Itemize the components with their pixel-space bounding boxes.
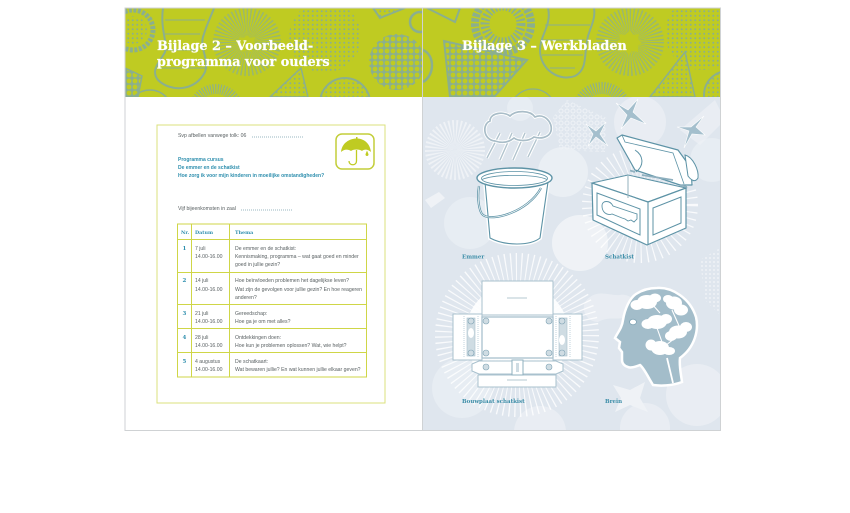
table: programme: Datum xyxy=(195,230,213,236)
icon: bucket xyxy=(477,168,552,244)
label: Emmer: Emmer xyxy=(462,254,484,260)
table: programme: 14.00-16.00 xyxy=(195,343,223,349)
text block: call-off note xyxy=(178,133,304,139)
table: programme: 14.00-16.00 xyxy=(195,319,223,325)
table: programme: 4 augustus xyxy=(195,359,221,365)
label: Schatkist: Schatkist xyxy=(605,254,634,260)
table: programme: De emmer en de schatkist: xyxy=(235,246,296,252)
label: Brein: Brein xyxy=(605,399,622,405)
table: programme: 5 xyxy=(182,359,186,365)
text block: course title: Hoe zorg ik voor mijn kinderen in moeilijke omstandigheden? xyxy=(178,173,324,179)
heading: Bijlage 2: programma voor ouders xyxy=(157,55,330,70)
panel: right page xyxy=(423,8,720,430)
table: programme: 2 xyxy=(182,278,186,284)
table: programme: 1 xyxy=(182,246,186,252)
background white diatom pattern xyxy=(425,97,720,430)
table: programme: 4 xyxy=(182,335,186,341)
icon: umbrella xyxy=(336,134,374,169)
table: programme: Kennismaking, programma – wat gaat goed en minder xyxy=(235,254,359,260)
table: programme: 14 juli xyxy=(195,278,208,284)
text block: call-off note: Svp afbellen vanwege tolk: 06 xyxy=(178,133,246,139)
heading: Bijlage 2 xyxy=(157,39,330,70)
text block: course title: Programma cursus xyxy=(178,157,224,163)
text block: five meetings xyxy=(178,206,293,212)
table: programme: De schatkaart: xyxy=(235,359,268,365)
icon: key xyxy=(602,202,637,222)
table: programme: Wat bewaren jullie? En wat kunnen jullie elkaar geven? xyxy=(235,367,361,373)
table: programme: 14.00-16.00 xyxy=(195,287,223,293)
panel: form frame xyxy=(157,125,385,403)
icon: stars xyxy=(586,99,705,148)
icon: head with brain trees xyxy=(615,288,697,386)
text block: five meetings: Vijf bijeenkomsten in zaal xyxy=(178,206,236,212)
table: programme: Nr. xyxy=(181,230,189,236)
panel: left page xyxy=(126,8,422,404)
table: programme: 7 juli xyxy=(195,246,206,252)
page border xyxy=(125,8,720,430)
table: programme: Ontdekkingen doen: xyxy=(235,335,281,341)
table: programme: Hoe kun je problemen oplossen? Wat, wie helpt? xyxy=(235,343,347,349)
label: Bouwplaat schatkist: Bouwplaat schatkist xyxy=(462,399,525,405)
heading: Bijlage 3: Bijlage 3 – Werkbladen xyxy=(462,39,627,54)
table: programme: 14.00-16.00 xyxy=(195,254,223,260)
header band left with diatom pattern xyxy=(126,8,422,97)
table: programme: Gereedschap: xyxy=(235,311,267,317)
table: programme: Hoe ga je om met alles? xyxy=(235,319,291,325)
table: programme: anderen? xyxy=(235,295,257,301)
diagram: chest net xyxy=(453,281,582,387)
table: programme: Thema xyxy=(235,230,253,236)
table: programme: 14.00-16.00 xyxy=(195,367,223,373)
table: programme: 3 xyxy=(182,311,186,317)
icon: rain cloud xyxy=(485,112,551,160)
table: programme: Wat zijn de gevolgen voor jullie gezin? En hoe reageren xyxy=(235,287,362,293)
table: programme: 21 juli xyxy=(195,311,208,317)
header band right with diatom pattern xyxy=(423,8,720,97)
table: programme: Hoe beïnvloeden problemen het dagelijkse leven? xyxy=(235,278,349,284)
text block: course title: De emmer en de schatkist xyxy=(178,165,240,171)
table: programme xyxy=(178,224,366,377)
table: programme: 28 juli xyxy=(195,335,208,341)
heading: Bijlage 2: Bijlage 2 – Voorbeeld- xyxy=(157,39,313,54)
icon: treasure chest xyxy=(592,135,698,245)
text block: course title xyxy=(178,157,324,179)
table: programme: goed in jullie gezin? xyxy=(235,262,280,268)
